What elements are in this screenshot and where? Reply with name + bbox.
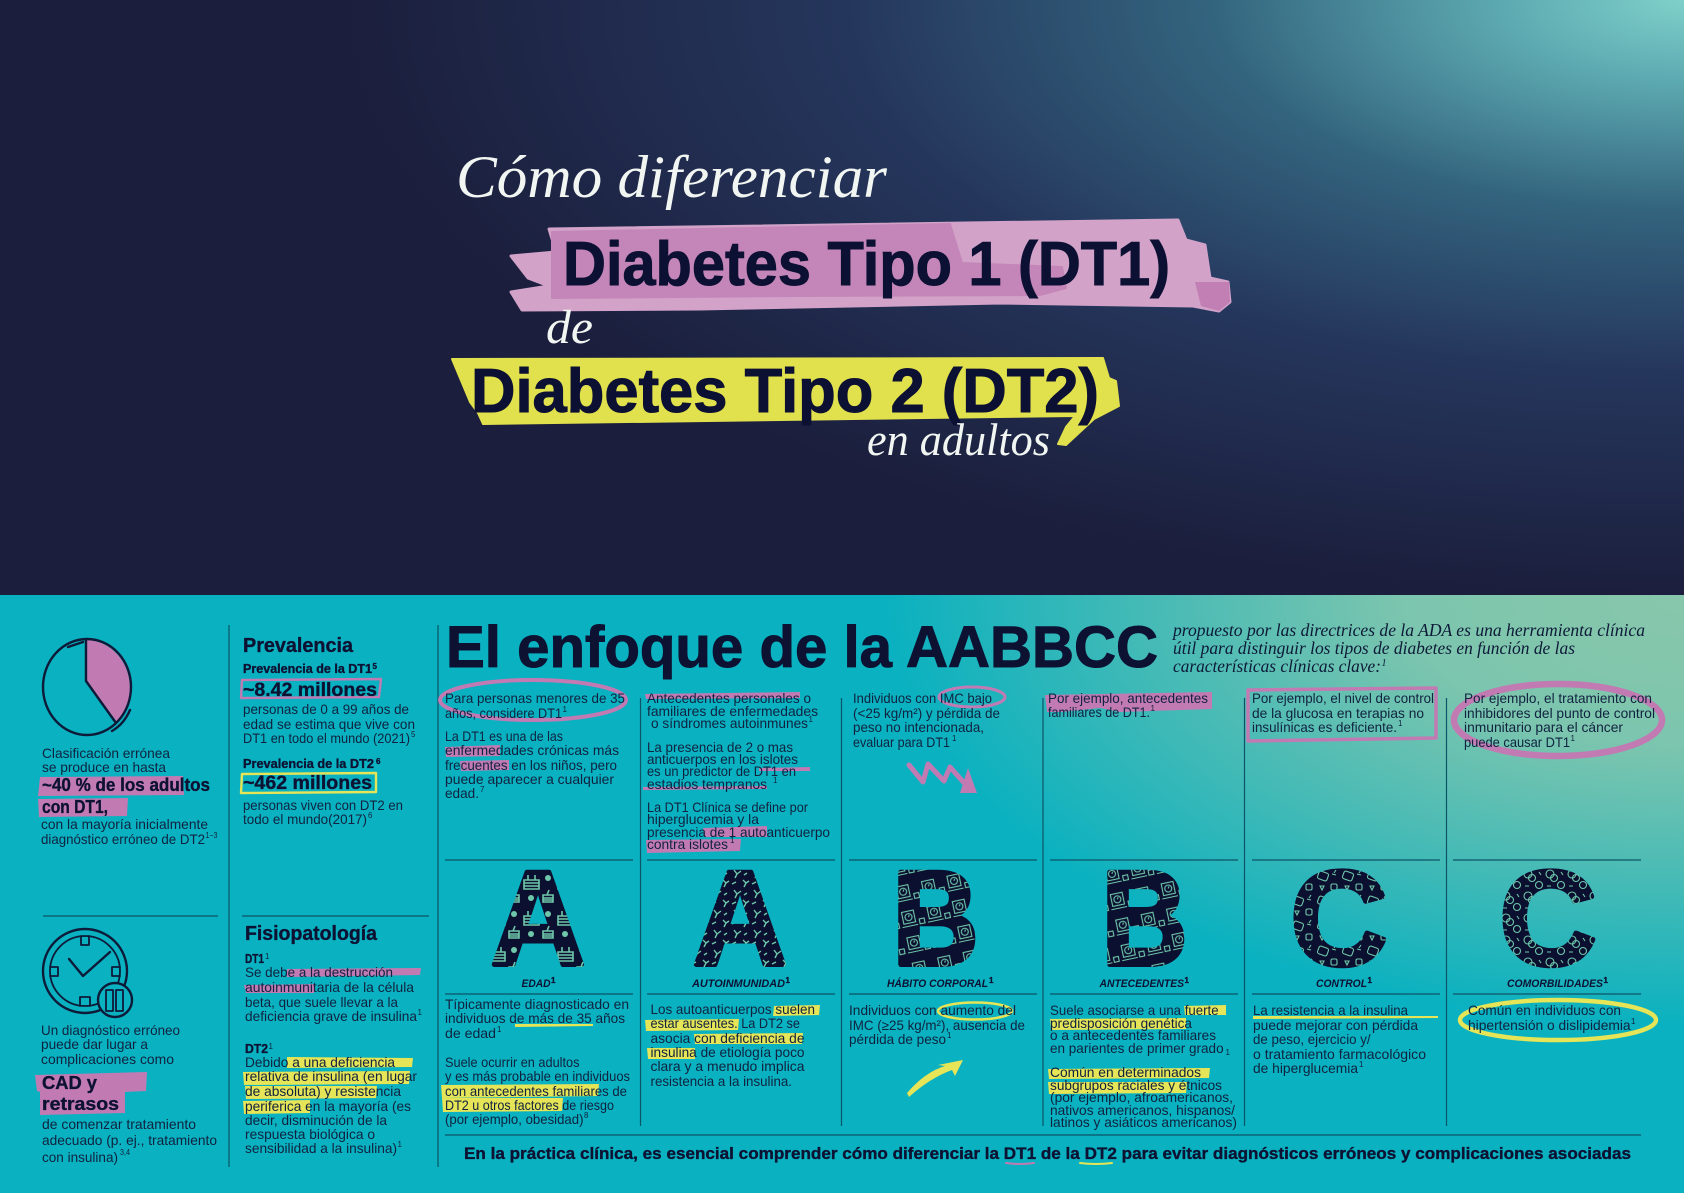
underline: DT1 <box>1006 1163 1034 1164</box>
text: DT2 pathophysiology: sensibilidad a la insulina) <box>245 1141 397 1156</box>
text: DT1 age: 7 <box>480 785 485 794</box>
text: DT2 pathophysiology: periferica en la mayoría (es <box>245 1099 411 1114</box>
text: DT2 history <box>1050 1003 1237 1130</box>
text: DT1 pathophysiology: 1 <box>265 952 270 961</box>
text: DT1 autoimmunity: anticuerpos en los islotes <box>647 752 798 767</box>
highlight: CAD y retrasos <box>35 1072 147 1115</box>
text: DT1 autoimmunity: 1 <box>773 776 778 785</box>
text: DT1 pathophysiology: autoinmunitaria de la célula <box>245 980 414 995</box>
text: DT2 control: puede mejorar con pérdida <box>1253 1018 1418 1033</box>
subheading: DT1 prevalence: Prevalencia de la DT1 <box>243 662 372 676</box>
text: DT2 body habitus <box>849 1003 1025 1047</box>
yellow circled note <box>1460 1000 1656 1040</box>
text: DT2 age: (por ejemplo, obesidad) <box>445 1112 584 1127</box>
text: DT2 prevalence detail <box>243 798 403 827</box>
text: DT1 prevalence detail: 5 <box>411 730 416 739</box>
section intro text: útil para distinguir los tipos de diabetes en función de las <box>1173 638 1575 658</box>
text: DT1 pathophysiology <box>245 952 422 1024</box>
text: DT1 pathophysiology: DT1 <box>245 952 264 966</box>
pink brush stroke <box>511 220 1230 311</box>
text: DT1 prevalence detail: edad se estima que vive con <box>243 717 415 732</box>
title line: Cómo diferenciar: Cómo diferenciar <box>456 144 888 210</box>
text: DT1 autoimmunity: La presencia de 2 o mas <box>647 740 793 755</box>
text: DT2 pathophysiology: de absoluta) y resistencia <box>245 1084 401 1099</box>
text: DT1 autoimmunity: presencia de 1 autoanticuerpo <box>647 825 830 840</box>
text: DT2 history: o a antecedentes familiares <box>1050 1028 1216 1043</box>
text: DT1 comorbidities: puede causar DT1 <box>1464 735 1570 750</box>
subheading: DT2 prevalence: 6 <box>376 757 381 766</box>
text: misdiagnosis consequences: puede dar lugar a <box>41 1037 148 1052</box>
column: EDAD <box>440 680 630 1127</box>
text: DT2 history: Común en determinados <box>1050 1065 1201 1080</box>
text: DT2 autoimmunity <box>650 1002 815 1089</box>
text: DT2 history: Suele asociarse a una fuerte <box>1050 1003 1219 1018</box>
text: DT2 prevalence detail: personas viven con DT2 en <box>243 798 403 813</box>
yellow circled note <box>938 1002 1012 1020</box>
text: DT1 comorbidities: inhibidores del punto de control <box>1464 706 1655 721</box>
text: DT2 autoimmunity: insulina de etiología poco <box>650 1045 804 1060</box>
label: AUTOINMUNIDAD: 1 <box>786 976 790 985</box>
icon: clock with pause <box>43 929 132 1017</box>
text: DT1 history <box>1048 691 1208 720</box>
text: DT1 body habitus: peso no intencionada, <box>853 720 984 735</box>
icon: pie chart <box>43 639 131 735</box>
text: DT2 control: de peso, ejercicio y/ <box>1253 1032 1371 1047</box>
text: misclassification statistic: se produce en hasta <box>42 760 166 775</box>
footer takeaway: En la práctica clínica, es esencial comprender cómo diferenciar la DT1 de la DT2 para evitar diagnósticos erróneos y complicaciones asociadas <box>464 1145 1631 1163</box>
text: DT1 autoimmunity: o síndromes autoinmunes <box>651 716 808 731</box>
panel: prevalence <box>241 635 416 827</box>
text: DT1 age: Para personas menores de 35 <box>445 691 625 706</box>
column: CONTROL <box>1248 688 1438 1076</box>
text: misclassification statistic <box>41 746 218 847</box>
column: AUTOINMUNIDAD <box>643 691 830 1089</box>
yellow underline <box>1253 1016 1438 1019</box>
text: DT2 history: en parientes de primer grado <box>1050 1041 1224 1056</box>
heading: Diabetes Tipo 2 (DT2): Diabetes Tipo 2 (DT2) <box>471 357 1099 426</box>
highlights <box>643 692 810 853</box>
text: DT1 body habitus: (<25 kg/m²) y pérdida de <box>853 706 1000 721</box>
text: DT2 pathophysiology: relativa de insulina (en lugar <box>245 1069 417 1084</box>
text: DT1 history: 1 <box>1150 704 1156 713</box>
highlights <box>445 745 509 771</box>
column: COMORBILIDADES <box>1454 684 1662 1040</box>
text: DT1 pathophysiology: deficiencia grave de insulina <box>245 1009 417 1024</box>
section title: El enfoque de la AABBCC: El enfoque de la AABBCC <box>446 615 1158 680</box>
text: DT1 age: enfermedades crónicas más <box>445 743 619 758</box>
highlights: DT2 age <box>441 1024 599 1112</box>
text: DT1 pathophysiology: beta, que suele llevar a la <box>245 995 398 1010</box>
text: DT2 control: La resistencia a la insulina <box>1253 1003 1408 1018</box>
text: misclassification statistic: con DT1, <box>42 797 108 817</box>
text: DT2 age <box>445 997 630 1127</box>
text: DT2 history: nativos americanos, hispanos/ <box>1050 1103 1235 1118</box>
text: DT1 prevalence detail: personas de 0 a 99 años de <box>243 702 409 717</box>
text: DT1 body habitus <box>853 691 1000 750</box>
text: DT1 age: años, considere DT1 <box>445 706 562 721</box>
subheading: DT2 prevalence: Prevalencia de la DT2 <box>243 757 374 771</box>
text: DT1 autoimmunity: 1 <box>808 715 814 724</box>
text: DT2 comorbidities: hipertensión o dislipidemia <box>1468 1018 1631 1033</box>
text: DT1 autoimmunity: estadios tempranos <box>647 777 767 792</box>
pink box <box>1248 688 1436 741</box>
text: DT1 body habitus: evaluar para DT1 <box>853 735 950 750</box>
text: DT1 autoimmunity: 1 <box>730 836 735 845</box>
icon: zigzag down arrow <box>909 764 977 793</box>
letter C with pill pattern: C <box>1500 844 1596 994</box>
label: ANTECEDENTES: 1 <box>1184 976 1190 985</box>
label: COMORBILIDADES: 1 <box>1604 976 1608 985</box>
text: DT1 age: frecuentes en los niños, pero <box>445 758 617 773</box>
text: DT1 control: 1 <box>1398 719 1403 728</box>
section intro text: 1 <box>1382 658 1386 669</box>
text: DT2 control <box>1253 1003 1426 1076</box>
highlight: 40 percent <box>38 776 184 817</box>
letter A with cake pattern: A <box>491 844 585 994</box>
text: DT2 control: de hiperglucemia <box>1253 1061 1358 1076</box>
column: HÁBITO CORPORAL <box>849 687 1025 1097</box>
text: DT2 body habitus: 1 <box>947 1031 952 1040</box>
text: misdiagnosis consequences: de comenzar tratamiento <box>42 1117 196 1132</box>
text: DT1 control: Por ejemplo, el nivel de control <box>1252 691 1434 706</box>
text: DT2 age: de edad <box>445 1026 496 1041</box>
text: DT1 body habitus: 1 <box>952 734 957 743</box>
text: DT1 age: edad. <box>445 786 479 801</box>
text: misclassification statistic: Clasificación errónea <box>42 746 170 761</box>
text: DT2 pathophysiology: DT2 <box>245 1042 268 1056</box>
text: DT2 age: 1 <box>497 1025 502 1034</box>
text: DT2 control: 1 <box>1359 1060 1364 1069</box>
text: misdiagnosis consequences: 3,4 <box>120 1148 130 1157</box>
text: DT2 age: individuos de más de 35 años <box>445 1011 625 1026</box>
label: ANTECEDENTES: ANTECEDENTES <box>1099 978 1185 990</box>
text: misdiagnosis consequences: Un diagnóstico erróneo <box>41 1023 180 1038</box>
highlights: DT2 autoimmunity <box>645 1005 820 1059</box>
text: DT2 comorbidities <box>1468 1003 1636 1033</box>
text: DT1 pathophysiology: Se debe a la destrucción <box>245 965 393 980</box>
text: DT2 comorbidities: Común en individuos con <box>1468 1003 1621 1018</box>
text: misdiagnosis consequences: CAD y <box>42 1073 97 1093</box>
highlights: DT2 history <box>1048 1005 1226 1094</box>
text: DT2 autoimmunity: asocia con deficiencia de <box>650 1031 804 1046</box>
structural dividers <box>43 625 1641 1167</box>
text: DT1 autoimmunity: La DT1 Clínica se define por <box>647 800 808 815</box>
text: DT2 autoimmunity: Los autoanticuerpos suelen <box>650 1002 815 1017</box>
text: DT2 history: subgrupos raciales y étnicos <box>1050 1078 1222 1093</box>
stat: 462 millones: ~462 millones <box>243 773 372 794</box>
heading: Diabetes Tipo 1 (DT1): Diabetes Tipo 1 (DT1) <box>563 230 1170 299</box>
pink circled note <box>1454 684 1662 756</box>
text: DT1 comorbidities <box>1464 691 1655 750</box>
text: DT2 age: con antecedentes familiares de <box>445 1084 627 1099</box>
section intro text: características clínicas clave: <box>1173 656 1381 676</box>
subheading: DT1 prevalence: 5 <box>372 662 378 671</box>
text: DT2 history: latinos y asiáticos americanos) <box>1050 1115 1237 1130</box>
highlights: DT2 pathophysiology <box>243 1057 413 1114</box>
text: misdiagnosis consequences <box>41 1023 217 1165</box>
text: DT1 body habitus: Individuos con IMC bajo <box>853 691 992 706</box>
highlights: DT1 pathophysiology <box>244 968 421 993</box>
text: DT2 body habitus: Individuos con aumento del <box>849 1003 1016 1018</box>
text: DT1 autoimmunity: contra islotes <box>647 837 728 852</box>
text: DT2 autoimmunity: clara y a menudo implica <box>650 1059 805 1074</box>
text: DT2 age: 8 <box>584 1111 589 1120</box>
text: DT2 comorbidities: 1 <box>1631 1017 1636 1026</box>
text: DT1 age: 1 <box>562 705 568 714</box>
yellow box <box>241 773 376 793</box>
text: DT1 comorbidities: Por ejemplo, el tratamiento con <box>1464 691 1652 706</box>
text: DT2 pathophysiology: Debido a una deficiencia <box>245 1055 395 1070</box>
section intro text <box>1171 620 1645 676</box>
text: DT1 age: puede aparecer a cualquier <box>445 772 614 787</box>
text: DT2 history: 1 <box>1226 1048 1230 1057</box>
text: DT2 control: o tratamiento farmacológico <box>1253 1047 1426 1062</box>
text: DT1 control: insulínicas es deficiente. <box>1252 720 1397 735</box>
panel: misclassification <box>38 639 218 847</box>
text: misclassification statistic: con la mayoría inicialmente <box>41 817 208 832</box>
text: DT1 comorbidities: inmunitario para el cáncer <box>1464 720 1623 735</box>
stat: 8.42 millones: ~8.42 millones <box>243 680 377 701</box>
text: DT2 pathophysiology: decir, disminución de la <box>245 1113 387 1128</box>
text: DT2 pathophysiology: respuesta biológica o <box>245 1127 375 1142</box>
section intro text: propuesto por las directrices de la ADA es una herramienta clínica <box>1171 620 1645 640</box>
text: DT2 history: (por ejemplo, afroamericanos, <box>1050 1090 1233 1105</box>
text: DT2 prevalence detail: 6 <box>368 811 373 820</box>
text: DT1 comorbidities: 1 <box>1570 734 1576 743</box>
text: DT2 pathophysiology: 1 <box>398 1140 402 1149</box>
text: misclassification statistic: ~40 % de los adultos <box>42 775 210 795</box>
label: EDAD: 1 <box>551 976 556 985</box>
text: DT1 control: de la glucosa en terapias no <box>1252 706 1424 721</box>
label: COMORBILIDADES: COMORBILIDADES <box>1507 978 1604 990</box>
text: DT1 age: La DT1 es una de las <box>445 729 563 744</box>
text: misdiagnosis consequences: retrasos <box>42 1094 119 1114</box>
text: DT1 prevalence detail <box>243 702 416 746</box>
label: CONTROL: CONTROL <box>1316 978 1367 990</box>
yellow brush stroke <box>452 358 1119 445</box>
text: DT2 history: predisposición genética <box>1050 1016 1192 1031</box>
connector: de: de <box>546 301 593 354</box>
label: EDAD: EDAD <box>522 978 551 990</box>
column: ANTECEDENTES <box>1045 691 1237 1130</box>
text: DT1 history: familiares de DT1. <box>1048 705 1150 720</box>
letter B with scale pattern: B <box>1102 844 1188 994</box>
pink box <box>241 679 381 698</box>
hero title <box>452 144 1230 465</box>
text: DT1 autoimmunity: es un predictor de DT1 en <box>647 764 796 779</box>
label: AUTOINMUNIDAD: AUTOINMUNIDAD <box>691 978 785 990</box>
text: DT2 body habitus: pérdida de peso <box>849 1032 946 1047</box>
text: misdiagnosis consequences: complicaciones como <box>41 1052 174 1067</box>
lower teal panel background <box>0 595 1684 1193</box>
subtitle: en adultos: en adultos <box>867 414 1050 465</box>
label: HÁBITO CORPORAL: 1 <box>989 976 994 985</box>
pink circled note <box>939 687 1005 707</box>
text: DT1 pathophysiology: 1 <box>418 1008 422 1017</box>
text: DT2 age: y es más probable en individuos <box>445 1069 630 1084</box>
text: misclassification statistic: diagnóstico erróneo de DT2 <box>41 832 205 847</box>
hero background <box>0 0 1684 595</box>
text: DT1 autoimmunity: hiperglucemia y la <box>647 812 759 827</box>
text: DT2 age: DT2 u otros factores de riesgo <box>445 1098 614 1113</box>
heading: Fisiopatología: Fisiopatología <box>245 923 378 945</box>
highlight <box>1045 692 1212 712</box>
text: DT2 prevalence detail: todo el mundo(2017) <box>243 812 367 827</box>
label: HÁBITO CORPORAL: HÁBITO CORPORAL <box>887 977 988 990</box>
text: DT2 age: Típicamente diagnosticado en <box>445 997 629 1012</box>
pink circled note <box>440 680 626 720</box>
text: DT1 age <box>445 691 625 801</box>
text: misdiagnosis consequences: adecuado (p. ej., tratamiento <box>42 1133 217 1148</box>
panel: pathophysiology <box>243 923 422 1156</box>
text: misdiagnosis consequences: con insulina) <box>42 1150 118 1165</box>
letter C with food pattern: C <box>1290 844 1388 994</box>
text: DT1 history: Por ejemplo, antecedentes <box>1048 691 1208 706</box>
underline: DT2 <box>1080 1163 1112 1164</box>
text: DT1 autoimmunity: familiares de enfermedades <box>647 704 818 719</box>
text: DT1 autoimmunity <box>647 691 830 852</box>
letter A with antibody pattern: A <box>693 844 787 994</box>
text: misclassification statistic: 1−3 <box>206 831 218 840</box>
panel: misdiagnosis <box>35 929 217 1165</box>
text: DT2 pathophysiology: 1 <box>268 1042 274 1051</box>
text: DT2 autoimmunity: resistencia a la insulina. <box>650 1074 792 1089</box>
text: DT2 age: Suele ocurrir en adultos <box>445 1055 580 1070</box>
text: DT2 body habitus: IMC (≥25 kg/m²), ausencia de <box>849 1018 1025 1033</box>
text: DT2 pathophysiology <box>245 1042 417 1156</box>
text: DT2 autoimmunity: estar ausentes. La DT2 se <box>650 1016 800 1031</box>
icon: upward arrow <box>907 1060 963 1097</box>
text: DT1 control <box>1252 691 1434 735</box>
label: CONTROL: 1 <box>1368 976 1372 985</box>
text: DT1 prevalence detail: DT1 en todo el mundo (2021) <box>243 731 410 746</box>
text: DT1 autoimmunity: Antecedentes personales o <box>647 691 811 706</box>
heading: Prevalencia: Prevalencia <box>243 635 354 657</box>
letter B with scale pattern: B <box>892 844 978 994</box>
